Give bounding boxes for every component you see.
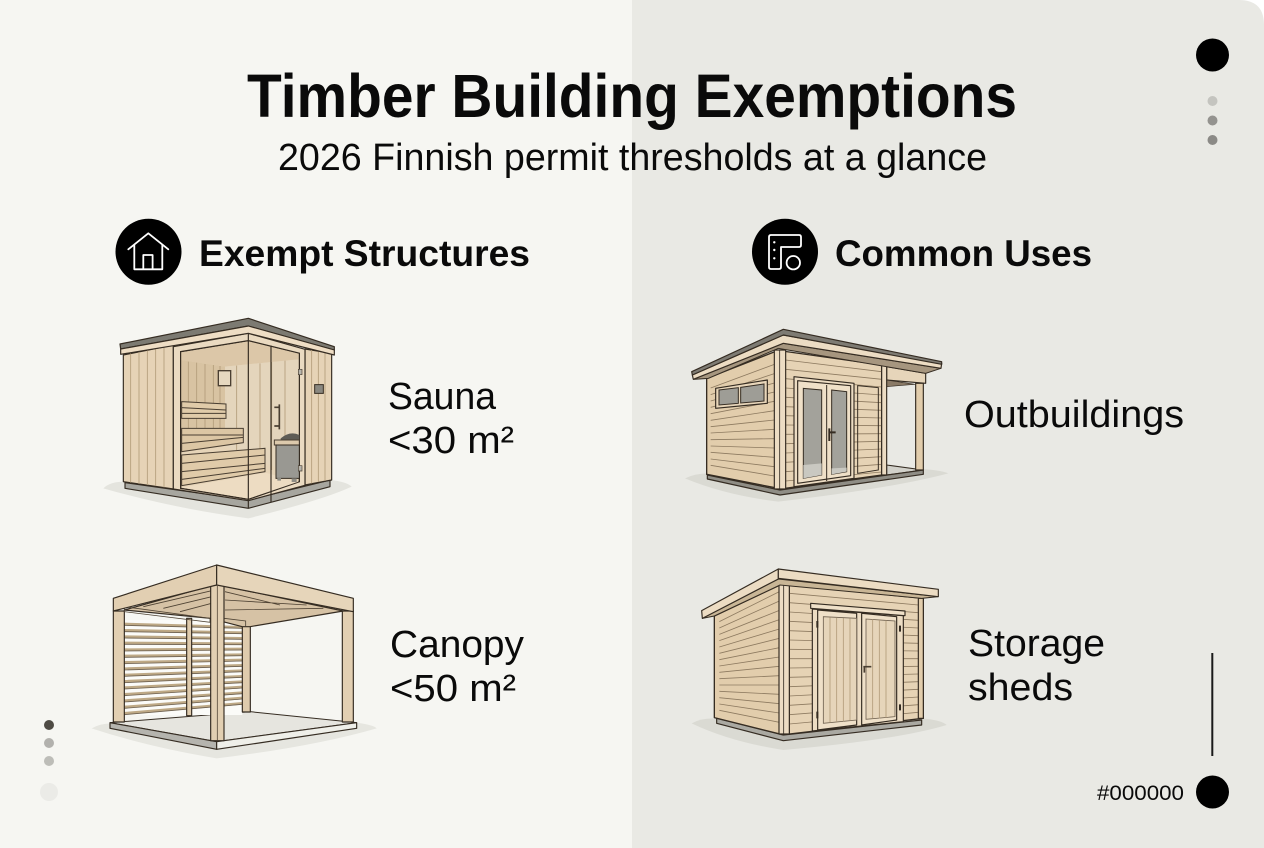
label: sauna xyxy=(388,376,514,462)
label: storage sheds: Storage xyxy=(968,623,1105,665)
label: storage sheds xyxy=(968,623,1105,709)
decoration: top right dots xyxy=(1196,38,1229,145)
illustration: outbuilding xyxy=(685,329,948,502)
label: canopy: <50 m² xyxy=(390,668,516,710)
colour swatch with hex label xyxy=(1097,776,1229,808)
panel: left background xyxy=(0,0,632,848)
illustration: canopy xyxy=(92,565,377,758)
decoration: vertical rule xyxy=(1211,653,1213,756)
panel: right background xyxy=(632,0,1264,848)
label: storage sheds: sheds xyxy=(968,667,1073,709)
subtitle: 2026 Finnish permit thresholds at a glance xyxy=(278,137,987,179)
label: sauna: Sauna xyxy=(388,376,497,418)
icon: house xyxy=(116,219,182,285)
label: canopy xyxy=(390,624,524,710)
label: outbuildings: Outbuildings xyxy=(964,394,1184,436)
heading: exempt structures: Exempt Structures xyxy=(199,233,530,274)
label: canopy: Canopy xyxy=(390,624,524,666)
illustration: storage shed xyxy=(692,569,947,750)
label: sauna: <30 m² xyxy=(388,420,514,462)
illustration: sauna xyxy=(103,318,352,518)
heading: common uses: Common Uses xyxy=(835,233,1092,274)
icon: floor plan xyxy=(752,219,818,285)
title: Timber Building Exemptions xyxy=(247,62,1017,130)
colour swatch with hex label: #000000 xyxy=(1097,782,1184,805)
decoration: bottom left dots xyxy=(40,720,58,801)
